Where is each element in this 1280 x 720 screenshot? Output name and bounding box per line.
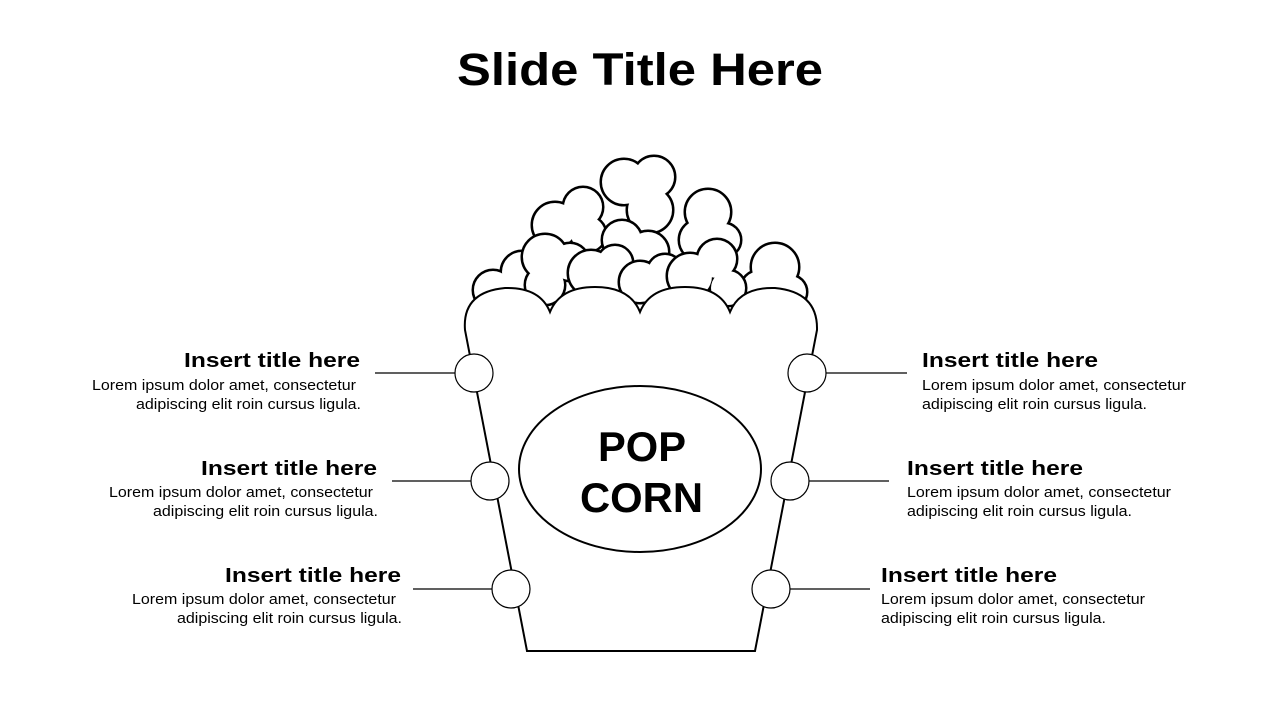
kernel: right lower [668,240,745,305]
text block: right 2: Insert title here [907,458,1083,480]
markers [455,354,826,608]
text block: right 2: Lorem ipsum dolor amet, consectetur [907,484,1171,501]
text block: right 3: adipiscing elit roin cursus ligula. [881,610,1106,627]
kernel: far left [474,252,542,315]
popcorn kernels [474,157,806,315]
text block: left 3: Lorem ipsum dolor amet, consectetur [132,591,396,608]
text block: left 1: Insert title here [184,350,360,372]
text block: left 3: Insert title here [225,565,401,587]
text block: left 2: Lorem ipsum dolor amet, consectetur [109,484,373,501]
label ellipse [519,386,761,552]
popcorn bucket [465,287,817,651]
text block: left 1 [92,350,361,413]
kernel: left lower [523,235,588,304]
label ellipse: POP [598,423,686,470]
kernel: right far [741,244,806,309]
text block: right 1: Insert title here [922,350,1098,372]
text block: right 1 [922,350,1186,413]
text block: right 3 [881,565,1145,627]
kernel: upper right [680,190,740,260]
text block: right 1: adipiscing elit roin cursus ligula. [922,396,1147,413]
text block: left 3 [132,565,402,627]
text block: left 2 [109,458,378,520]
text block: left 2: Insert title here [201,458,377,480]
text block: left 1: Lorem ipsum dolor amet, consectetur [92,377,356,394]
kernel: top [602,157,674,232]
text block: right 2: adipiscing elit roin cursus ligula. [907,503,1132,520]
text block: right 3: Lorem ipsum dolor amet, consectetur [881,591,1145,608]
text block: left 2: adipiscing elit roin cursus ligula. [153,503,378,520]
title: Slide Title Here [457,44,823,95]
text block: right 1: Lorem ipsum dolor amet, consectetur [922,377,1186,394]
kernel: middle [603,221,668,285]
connectors [375,373,907,589]
text block: left 1: adipiscing elit roin cursus ligula. [136,396,361,413]
kernel: center lower [569,246,632,309]
text block: right 3: Insert title here [881,565,1057,587]
kernel: center right lower [620,255,682,312]
text block: right 2 [907,458,1171,520]
text block: left 3: adipiscing elit roin cursus ligula. [177,610,402,627]
label ellipse: CORN [580,474,703,521]
kernel: upper left [533,188,605,251]
